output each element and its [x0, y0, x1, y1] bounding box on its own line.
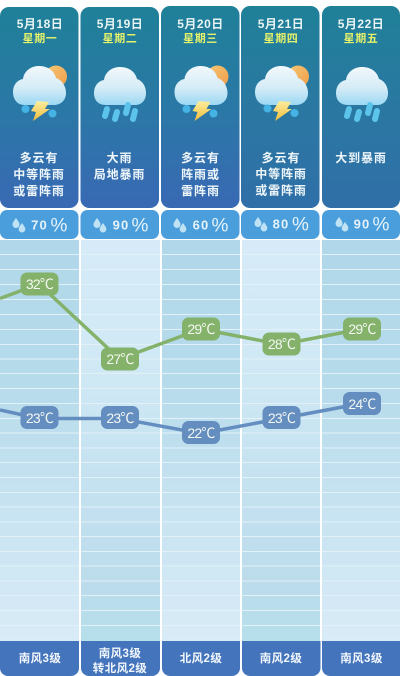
description: 局地暴雨 [94, 166, 145, 182]
probability value: % [292, 214, 309, 236]
description: 或雷阵雨 [255, 182, 307, 198]
label: low 23 [262, 406, 300, 429]
label: high 28: 28℃ [268, 336, 296, 352]
icon: cloud with sun, lightning and rain [174, 66, 228, 121]
date: 5月18日 [17, 17, 63, 31]
icon: water drops [12, 218, 25, 232]
label: high 32 [20, 272, 58, 296]
probability value: 70 [31, 218, 48, 232]
panel: wind day 2 [81, 641, 160, 676]
panel: wind day 5 [322, 641, 400, 676]
panel: wind day 1 [0, 641, 79, 676]
date: 5月22日 [338, 17, 384, 31]
panel: precipitation probability day 3 [161, 210, 240, 239]
label: high 29: 29℃ [187, 321, 215, 337]
panel: wind day 3 [162, 641, 240, 676]
icon: water drops [336, 217, 348, 232]
label: low 24: 24℃ [348, 396, 376, 412]
panel: wind day 1: 南风3级 [19, 651, 61, 665]
icon: cloud with sun, lightning and rain [255, 66, 309, 121]
panel: precipitation probability day 1 [0, 210, 78, 239]
label: high 27 [101, 348, 139, 370]
label: high 29: 29℃ [348, 321, 376, 337]
probability value: % [132, 216, 149, 236]
panel: wind day 2: 转北风2级 [93, 661, 147, 675]
probability value: % [51, 216, 68, 236]
weekday: 星期四 [264, 31, 298, 45]
icon: cloud with sun, lightning and rain [13, 66, 67, 121]
probability value: 90 [113, 218, 129, 232]
icon: rain cloud [336, 67, 388, 119]
description: 中等阵雨 [255, 166, 307, 181]
description: 雷阵雨 [181, 183, 220, 198]
label: high 27: 27℃ [106, 351, 134, 367]
description: 多云有 [181, 150, 220, 165]
label: high 32: 32℃ [26, 276, 54, 292]
panel: day 3 header [161, 6, 240, 208]
description: 中等阵雨 [13, 166, 65, 182]
probability value: % [373, 214, 390, 236]
label: low 23 [20, 406, 58, 429]
weekday: 星期一 [23, 31, 57, 45]
panel: precipitation probability day 2 [80, 210, 159, 239]
panel: precipitation probability day 5 [322, 210, 400, 239]
label: low 22 [182, 421, 220, 444]
date: 5月19日 [97, 17, 143, 31]
panel: wind day 4: 南风2级 [260, 651, 302, 665]
line chart: high temperature [0, 272, 381, 370]
icon: rain cloud [94, 67, 146, 119]
label: low 23: 23℃ [268, 410, 296, 426]
label: low 24 [343, 392, 381, 415]
panel: wind day 4 [242, 641, 320, 676]
panel: precipitation probability day 4 [241, 210, 320, 239]
icon: water drops [254, 217, 267, 232]
date: 5月21日 [258, 17, 304, 31]
description: 或雷阵雨 [13, 183, 65, 198]
description: 大到暴雨 [335, 150, 387, 165]
description: 阵雨或 [181, 166, 220, 182]
panel: temperature chart background [0, 240, 400, 641]
label: low 22: 22℃ [187, 425, 215, 441]
panel: day 1 header [0, 7, 78, 208]
weekday: 星期二 [103, 31, 137, 45]
label: low 23: 23℃ [26, 410, 54, 426]
icon: water drops [174, 218, 186, 232]
description: 大雨 [107, 150, 132, 165]
panel: wind day 2: 南风3级 [99, 646, 141, 660]
label: high 29 [343, 318, 381, 340]
weekday: 星期五 [344, 31, 378, 45]
probability value: 90 [354, 216, 370, 232]
icon: water drops [94, 218, 106, 232]
line chart: low temperature [0, 392, 381, 444]
label: high 29 [182, 318, 220, 340]
description: 多云有 [20, 150, 58, 165]
probability value: 60 [193, 218, 209, 232]
date: 5月20日 [177, 17, 224, 31]
label: low 23 [101, 406, 139, 429]
panel: day 2 header [80, 7, 159, 208]
label: high 28 [262, 332, 300, 356]
panel: day 5 header [322, 6, 400, 208]
probability value: % [212, 216, 229, 236]
probability value: 80 [273, 216, 289, 232]
label: low 23: 23℃ [106, 410, 134, 426]
weekday: 星期三 [183, 31, 218, 45]
panel: day 4 header [241, 6, 320, 208]
panel: wind day 3: 北风2级 [180, 651, 222, 665]
description: 多云有 [262, 150, 300, 165]
panel: wind day 5: 南风3级 [340, 651, 383, 665]
